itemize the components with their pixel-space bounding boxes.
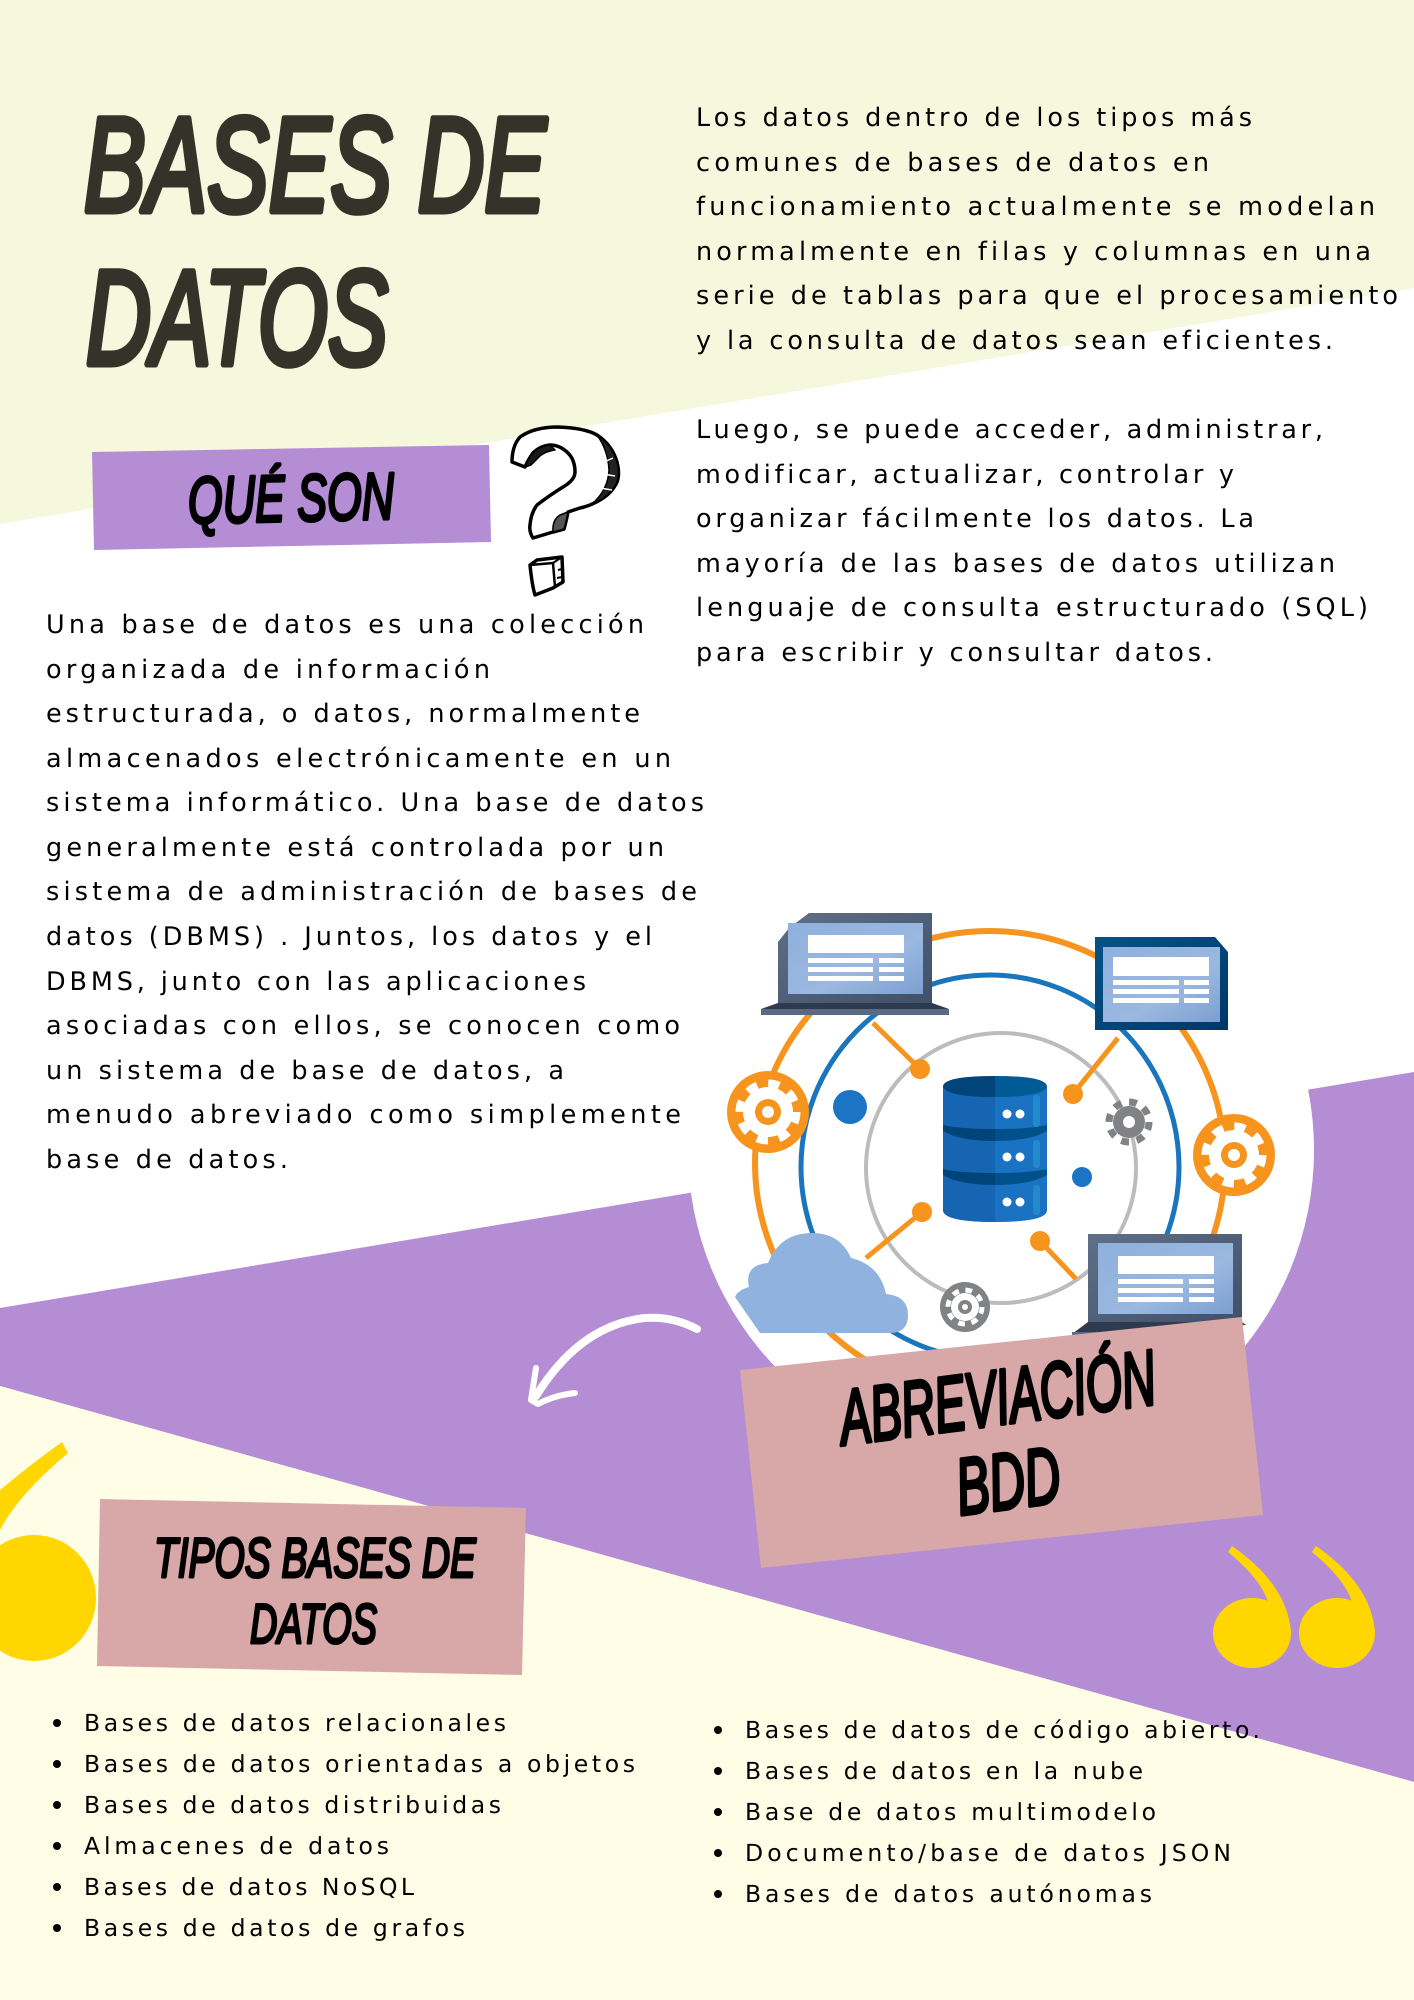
blue middle ring	[801, 975, 1179, 1359]
intro text: right column paragraph 1	[696, 103, 1398, 356]
background: pale green top	[0, 0, 1414, 524]
intro text: right column paragraph 1: comunes de bases de datos en	[696, 148, 1209, 178]
icon: orange gear left	[727, 1071, 809, 1153]
icon: orange gear right	[1193, 1114, 1275, 1196]
heading tag: tipos bases de datos	[97, 1499, 526, 1675]
text block: qué son: estructurada, o datos, normalmente	[46, 699, 640, 729]
text block: qué son: datos (DBMS) . Juntos, los datos y el	[46, 922, 652, 952]
white circle behind illustration	[688, 837, 1314, 1463]
illustration: database network	[727, 913, 1275, 1395]
icon: question mark	[512, 427, 618, 595]
text block: qué son: Una base de datos es una colección	[46, 610, 644, 640]
heading tag: qué son	[92, 445, 491, 550]
text block: qué son: organizada de información	[46, 655, 490, 685]
intro text: right column paragraph 2	[696, 415, 1368, 668]
heading tag: tipos bases de datos: TIPOS BASES DE	[154, 1526, 476, 1589]
list: database types left: Bases de datos de grafos	[84, 1914, 465, 1942]
blue dots	[833, 1090, 1092, 1187]
orange outer ring	[755, 931, 1225, 1395]
list: database types left: Bases de datos distribuidas	[84, 1791, 501, 1819]
list: database types left: Bases de datos orientadas a objetos	[84, 1750, 635, 1778]
list: database types right: Bases de datos de código abierto.	[745, 1716, 1260, 1744]
title	[84, 91, 547, 393]
intro text: right column paragraph 1: funcionamiento actualmente se modelan	[696, 192, 1375, 222]
text block: qué son: un sistema de base de datos, a	[46, 1056, 564, 1086]
list: database types left: Bases de datos relacionales	[84, 1709, 506, 1737]
text block: qué son: asociadas con ellos, se conocen como	[46, 1011, 680, 1041]
intro text: right column paragraph 2: mayoría de las bases de datos utilizan	[696, 549, 1335, 579]
list: database types left: Bases de datos NoSQL	[84, 1873, 414, 1901]
intro text: right column paragraph 1: Los datos dentro de los tipos más	[696, 103, 1252, 133]
icon: database cylinder	[943, 1076, 1047, 1222]
intro text: right column paragraph 1: serie de tablas para que el procesamiento	[696, 281, 1398, 311]
icon: right yellow quote	[1213, 1546, 1375, 1668]
icon: laptop bottom right	[1072, 1234, 1246, 1338]
list: database types right: Bases de datos autónomas	[745, 1880, 1152, 1908]
intro text: right column paragraph 2: modificar, actualizar, controlar y	[696, 460, 1234, 490]
heading tag: abreviación: ABREVIACIÓN	[831, 1333, 1161, 1462]
list: database types right: Bases de datos en la nube	[745, 1757, 1143, 1785]
icon: gray gear upper	[1109, 1102, 1149, 1142]
intro text: right column paragraph 1: normalmente en filas y columnas en una	[696, 237, 1371, 267]
text block: qué son	[46, 610, 704, 1175]
title: DATOS	[86, 244, 388, 393]
heading tag: tipos bases de datos: DATOS	[250, 1592, 377, 1655]
background: purple band	[0, 1072, 1414, 1782]
text block: qué son: DBMS, junto con las aplicaciones	[46, 967, 586, 997]
icon: gray gear lower	[940, 1282, 990, 1332]
text block: qué son: menudo abreviado como simplemente	[46, 1100, 681, 1130]
text block: qué son: generalmente está controlada por un	[46, 833, 664, 863]
heading tag: abreviación: BDD	[951, 1430, 1065, 1532]
text block: qué son: almacenados electrónicamente en un	[46, 744, 671, 774]
arrow: white curved	[531, 1318, 697, 1404]
icon: laptop top left	[761, 913, 949, 1015]
intro text: right column paragraph 1: y la consulta de datos sean eficientes.	[696, 326, 1333, 356]
gray inner ring	[866, 1033, 1136, 1303]
heading tag: qué son: QUÉ SON	[187, 459, 395, 537]
text block: qué son: sistema informático. Una base de datos	[46, 788, 704, 818]
intro text: right column paragraph 2: para escribir y consultar datos.	[696, 638, 1213, 668]
icon: left yellow quote	[0, 1442, 96, 1661]
heading tag: abreviación	[740, 1317, 1263, 1568]
list: database types right: Base de datos multimodelo	[745, 1798, 1156, 1826]
list: database types right: Documento/base de datos JSON	[745, 1839, 1231, 1867]
list: database types left: Almacenes de datos	[84, 1832, 389, 1860]
text block: qué son: base de datos.	[46, 1145, 288, 1175]
list: database types left	[53, 1709, 635, 1942]
intro text: right column paragraph 2: lenguaje de consulta estructurado (SQL)	[696, 593, 1368, 623]
title: BASES DE	[84, 91, 547, 240]
icon: cloud	[735, 1233, 908, 1333]
list: database types right	[714, 1716, 1260, 1908]
orange connectors	[866, 1023, 1118, 1279]
background: cream bottom	[0, 1386, 1414, 2000]
intro text: right column paragraph 2: Luego, se puede acceder, administrar,	[696, 415, 1323, 445]
icon: monitor top right	[1095, 937, 1228, 1030]
text block: qué son: sistema de administración de bases de	[46, 877, 697, 907]
intro text: right column paragraph 2: organizar fácilmente los datos. La	[696, 504, 1254, 534]
